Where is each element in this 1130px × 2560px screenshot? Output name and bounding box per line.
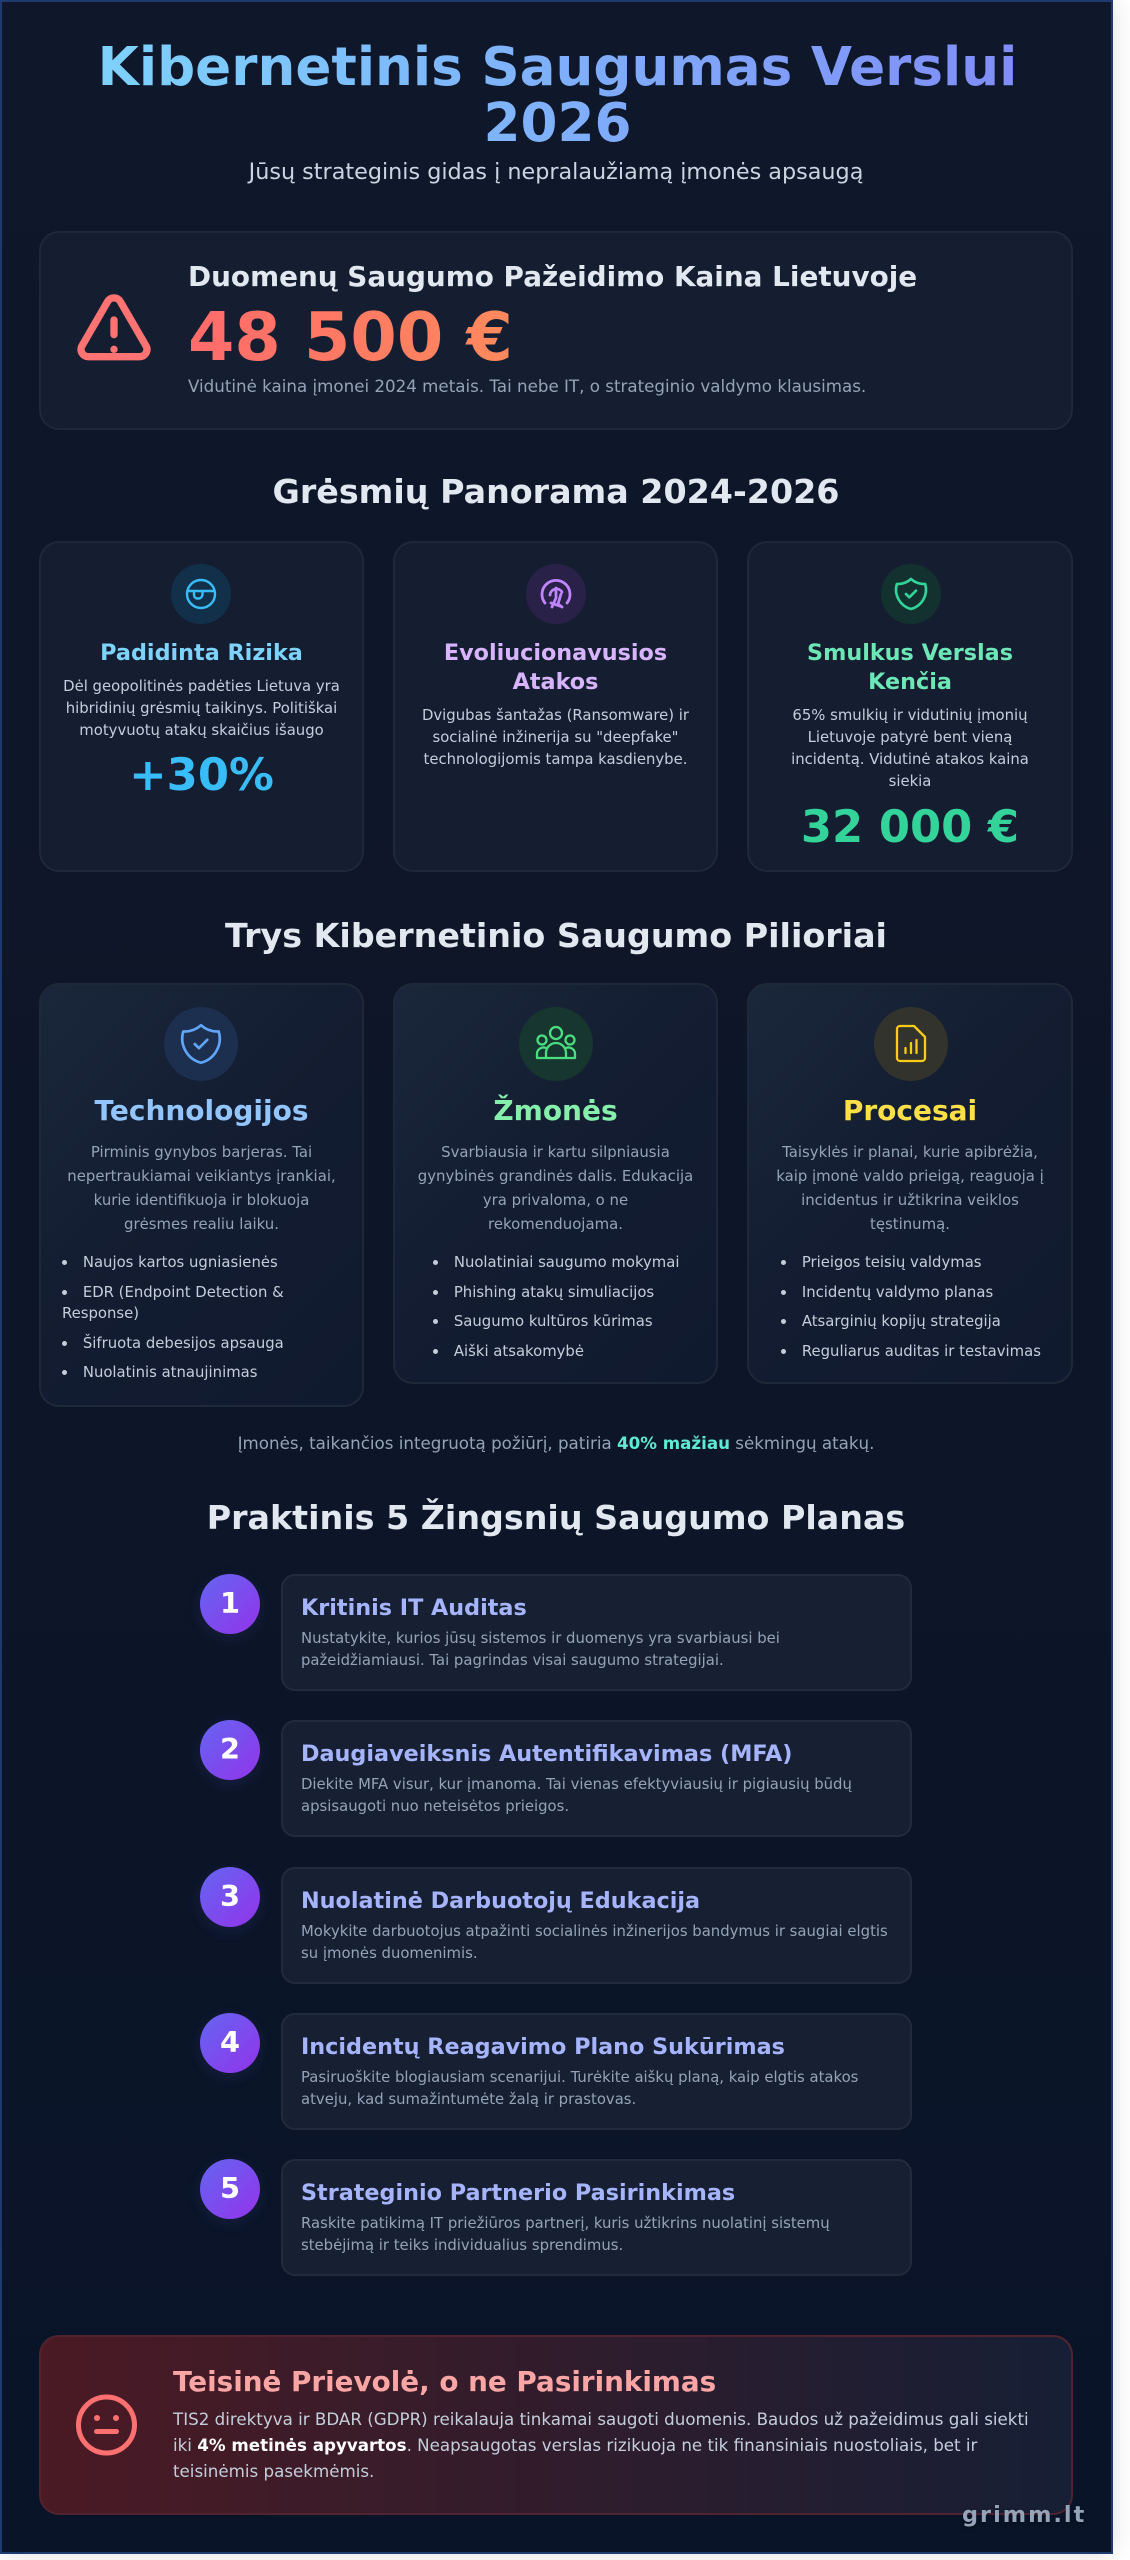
pillar list: Prieigos teisių valdymas — [802, 1253, 982, 1271]
pillar text: Taisyklės ir planai, kurie apibrėžia, — [782, 1143, 1038, 1161]
step 5 number: 5 — [220, 2171, 240, 2205]
panel: people — [393, 983, 718, 1384]
step 4 text: Pasiruoškite blogiausiam scenarijui. Turėkite aiškų planą, kaip elgtis atakos — [301, 2068, 858, 2086]
pillar list: Nuolatiniai saugumo mokymai — [454, 1253, 679, 1271]
step 3 number: 3 — [220, 1879, 240, 1913]
step 5 text — [301, 2214, 830, 2254]
step 1 heading: Kritinis IT Auditas — [301, 1595, 527, 1621]
card text: 65% smulkių ir vidutinių įmonių — [792, 706, 1028, 724]
icon: shield check — [164, 1007, 238, 1081]
watermark: grimm.lt — [962, 2502, 1086, 2528]
icon: warning triangle — [77, 294, 151, 360]
icon: neutral face — [76, 2394, 137, 2456]
icon: risk — [171, 564, 231, 624]
title: 2026 — [483, 92, 632, 154]
legal text — [172, 2409, 1029, 2481]
pillar text — [67, 1143, 336, 1233]
pillar text: yra privaloma, o ne — [483, 1191, 628, 1209]
pillar text: grėsmes realiu laiku. — [124, 1215, 279, 1233]
pillar list: EDR (Endpoint Detection & Response) — [62, 1283, 284, 1322]
step 5 heading: Strateginio Partnerio Pasirinkimas — [301, 2180, 735, 2206]
step 5 card — [281, 2159, 912, 2276]
stat: +30% — [129, 748, 274, 801]
card heading: Smulkus Verslas — [807, 640, 1013, 666]
step 4 number — [200, 2013, 260, 2073]
step 4 text — [301, 2068, 858, 2108]
card heading: Kenčia — [868, 669, 952, 695]
pillar text: Svarbiausia ir kartu silpniausia — [441, 1143, 670, 1161]
pillar text: tęstinumą. — [870, 1215, 950, 1233]
heading: threats: Grėsmių Panorama 2024-2026 — [273, 472, 839, 511]
step 1 text: Nustatykite, kurios jūsų sistemos ir duomenys yra svarbiausi bei — [301, 1629, 780, 1647]
step 4 card — [281, 2013, 912, 2130]
card heading — [807, 640, 1013, 695]
heading: plan: Praktinis 5 Žingsnių Saugumo Planas — [207, 1498, 905, 1537]
card text: motyvuotų atakų skaičius išaugo — [79, 721, 324, 739]
step 3 text: su įmonės duomenimis. — [301, 1944, 478, 1962]
panel: technologies — [39, 983, 364, 1407]
pillar text — [418, 1143, 693, 1233]
step 2 number: 2 — [220, 1732, 240, 1766]
pillar text: nepertraukiamai veikiantys įrankiai, — [67, 1167, 336, 1185]
panel: processes — [747, 983, 1073, 1384]
integrated approach note: Įmonės, taikančios integruotą požiūrį, patiria 40% mažiau sėkmingų atakų. — [238, 1433, 874, 1453]
hero note: Vidutinė kaina įmonei 2024 metais. Tai nebe IT, o strateginio valdymo klausimas. — [188, 376, 866, 396]
legal heading: Teisinė Prievolė, o ne Pasirinkimas — [173, 2365, 716, 2398]
pillar text: Pirminis gynybos barjeras. Tai — [91, 1143, 312, 1161]
icon: document chart — [874, 1007, 948, 1081]
pillar heading: Procesai — [843, 1094, 977, 1127]
panel: evolved attacks — [393, 541, 718, 872]
step 3 number — [200, 1867, 260, 1927]
panel: data breach cost — [39, 231, 1073, 430]
step 3 heading: Nuolatinė Darbuotojų Edukacija — [301, 1888, 700, 1914]
pillar heading: Žmonės — [493, 1094, 618, 1127]
pillar list — [433, 1253, 679, 1360]
panel: small business — [747, 541, 1073, 872]
hero heading: Duomenų Saugumo Pažeidimo Kaina Lietuvoje — [188, 260, 917, 293]
title — [89, 39, 1026, 151]
pillar list: Reguliarus auditas ir testavimas — [802, 1342, 1041, 1360]
legal text: TIS2 direktyva ir BDAR (GDPR) reikalauja tinkamai saugoti duomenis. Baudos už pažeidimus gali siekti — [173, 2409, 1029, 2429]
step 2 text: apsisaugoti nuo neteisėtos prieigos. — [301, 1797, 569, 1815]
step 5 number — [200, 2159, 260, 2219]
card text: Lietuvoje patyrė bent vieną — [808, 728, 1012, 746]
step 1 text: pažeidžiamiausi. Tai pagrindas visai saugumo strategijai. — [301, 1651, 724, 1669]
step 1 text — [301, 1629, 780, 1669]
step 2 card — [281, 1720, 912, 1837]
step 4 heading: Incidentų Reagavimo Plano Sukūrimas — [301, 2034, 785, 2060]
pillar list — [62, 1253, 284, 1381]
card text: Dvigubas šantažas (Ransomware) ir — [422, 706, 689, 724]
step 2 heading: Daugiaveiksnis Autentifikavimas (MFA) — [301, 1741, 792, 1767]
step 2 number — [200, 1720, 260, 1780]
pillar heading: Technologijos — [94, 1094, 309, 1127]
step 3 text: Mokykite darbuotojus atpažinti socialinės inžinerijos bandymus ir saugiai elgtis — [301, 1922, 888, 1940]
pillar list: Nuolatinis atnaujinimas — [83, 1363, 257, 1381]
pillar text: rekomenduojama. — [488, 1215, 623, 1233]
card text: technologijomis tampa kasdienybe. — [424, 750, 687, 768]
card heading — [444, 640, 667, 695]
stat: 32 000 € — [801, 800, 1019, 853]
pillar list: Saugumo kultūros kūrimas — [454, 1312, 653, 1330]
icon: shield — [881, 564, 941, 624]
step 1 number: 1 — [220, 1586, 240, 1620]
step 1 card — [281, 1574, 912, 1691]
pillar list: Atsarginių kopijų strategija — [802, 1312, 1001, 1330]
card heading: Padidinta Rizika — [100, 640, 303, 666]
card text — [63, 677, 340, 739]
icon: attack — [526, 564, 586, 624]
card text: incidentą. Vidutinė atakos kaina — [791, 750, 1029, 768]
card text: hibridinių grėsmių taikinys. Politiškai — [66, 699, 337, 717]
step 4 text: atveju, kad sumažintumėte žalą ir prastovas. — [301, 2090, 636, 2108]
pillar text: gynybinės grandinės dalis. Edukacija — [418, 1167, 693, 1185]
card text: socialinė inžinerija su "deepfake" — [432, 728, 678, 746]
pillar text: kaip įmonė valdo prieigą, reaguoja į — [776, 1167, 1044, 1185]
step 5 text: stebėjimą ir teiks individualius sprendimus. — [301, 2236, 623, 2254]
pillar list: Incidentų valdymo planas — [802, 1283, 993, 1301]
panel: legal obligation — [39, 2335, 1073, 2515]
pillar list — [781, 1253, 1041, 1360]
card text — [791, 706, 1029, 790]
card heading: Evoliucionavusios — [444, 640, 667, 666]
step 1 number — [200, 1574, 260, 1634]
legal text: teisinėmis pasekmėmis. — [173, 2461, 374, 2481]
step 5 text: Raskite patikimą IT priežiūros partnerį, kuris užtikrins nuolatinį sistemų — [301, 2214, 830, 2232]
icon: people — [519, 1007, 593, 1081]
pillar text — [776, 1143, 1044, 1233]
card heading: Atakos — [513, 669, 598, 695]
pillar list: Aiški atsakomybė — [454, 1342, 584, 1360]
pillar list: Šifruota debesijos apsauga — [83, 1334, 284, 1352]
step 2 text: Diekite MFA visur, kur įmanoma. Tai vienas efektyviausių ir pigiausių būdų — [301, 1775, 852, 1793]
subtitle: Jūsų strateginis gidas į nepralaužiamą įmonės apsaugą — [249, 159, 863, 185]
step 3 text — [301, 1922, 888, 1962]
title: Kibernetinis Saugumas Verslui — [98, 36, 1017, 98]
card text: Dėl geopolitinės padėties Lietuva yra — [63, 677, 340, 695]
card text — [422, 706, 689, 768]
heading: pillars: Trys Kibernetinio Saugumo Pilioriai — [225, 916, 887, 955]
panel: increased risk — [39, 541, 364, 872]
pillar list: Naujos kartos ugniasienės — [83, 1253, 278, 1271]
pillar text: kurie identifikuoja ir blokuoja — [94, 1191, 309, 1209]
step 2 text — [301, 1775, 852, 1815]
hero number: 48 500 € — [188, 298, 513, 376]
legal text: iki 4% metinės apyvartos. Neapsaugotas verslas rizikuoja ne tik finansiniais nuostoliais, bet ir — [173, 2435, 977, 2455]
pillar list: Phishing atakų simuliacijos — [454, 1283, 654, 1301]
step 4 number: 4 — [220, 2025, 240, 2059]
step 3 card — [281, 1867, 912, 1984]
card text: siekia — [889, 772, 931, 790]
pillar text: incidentus ir užtikrina veiklos — [801, 1191, 1019, 1209]
